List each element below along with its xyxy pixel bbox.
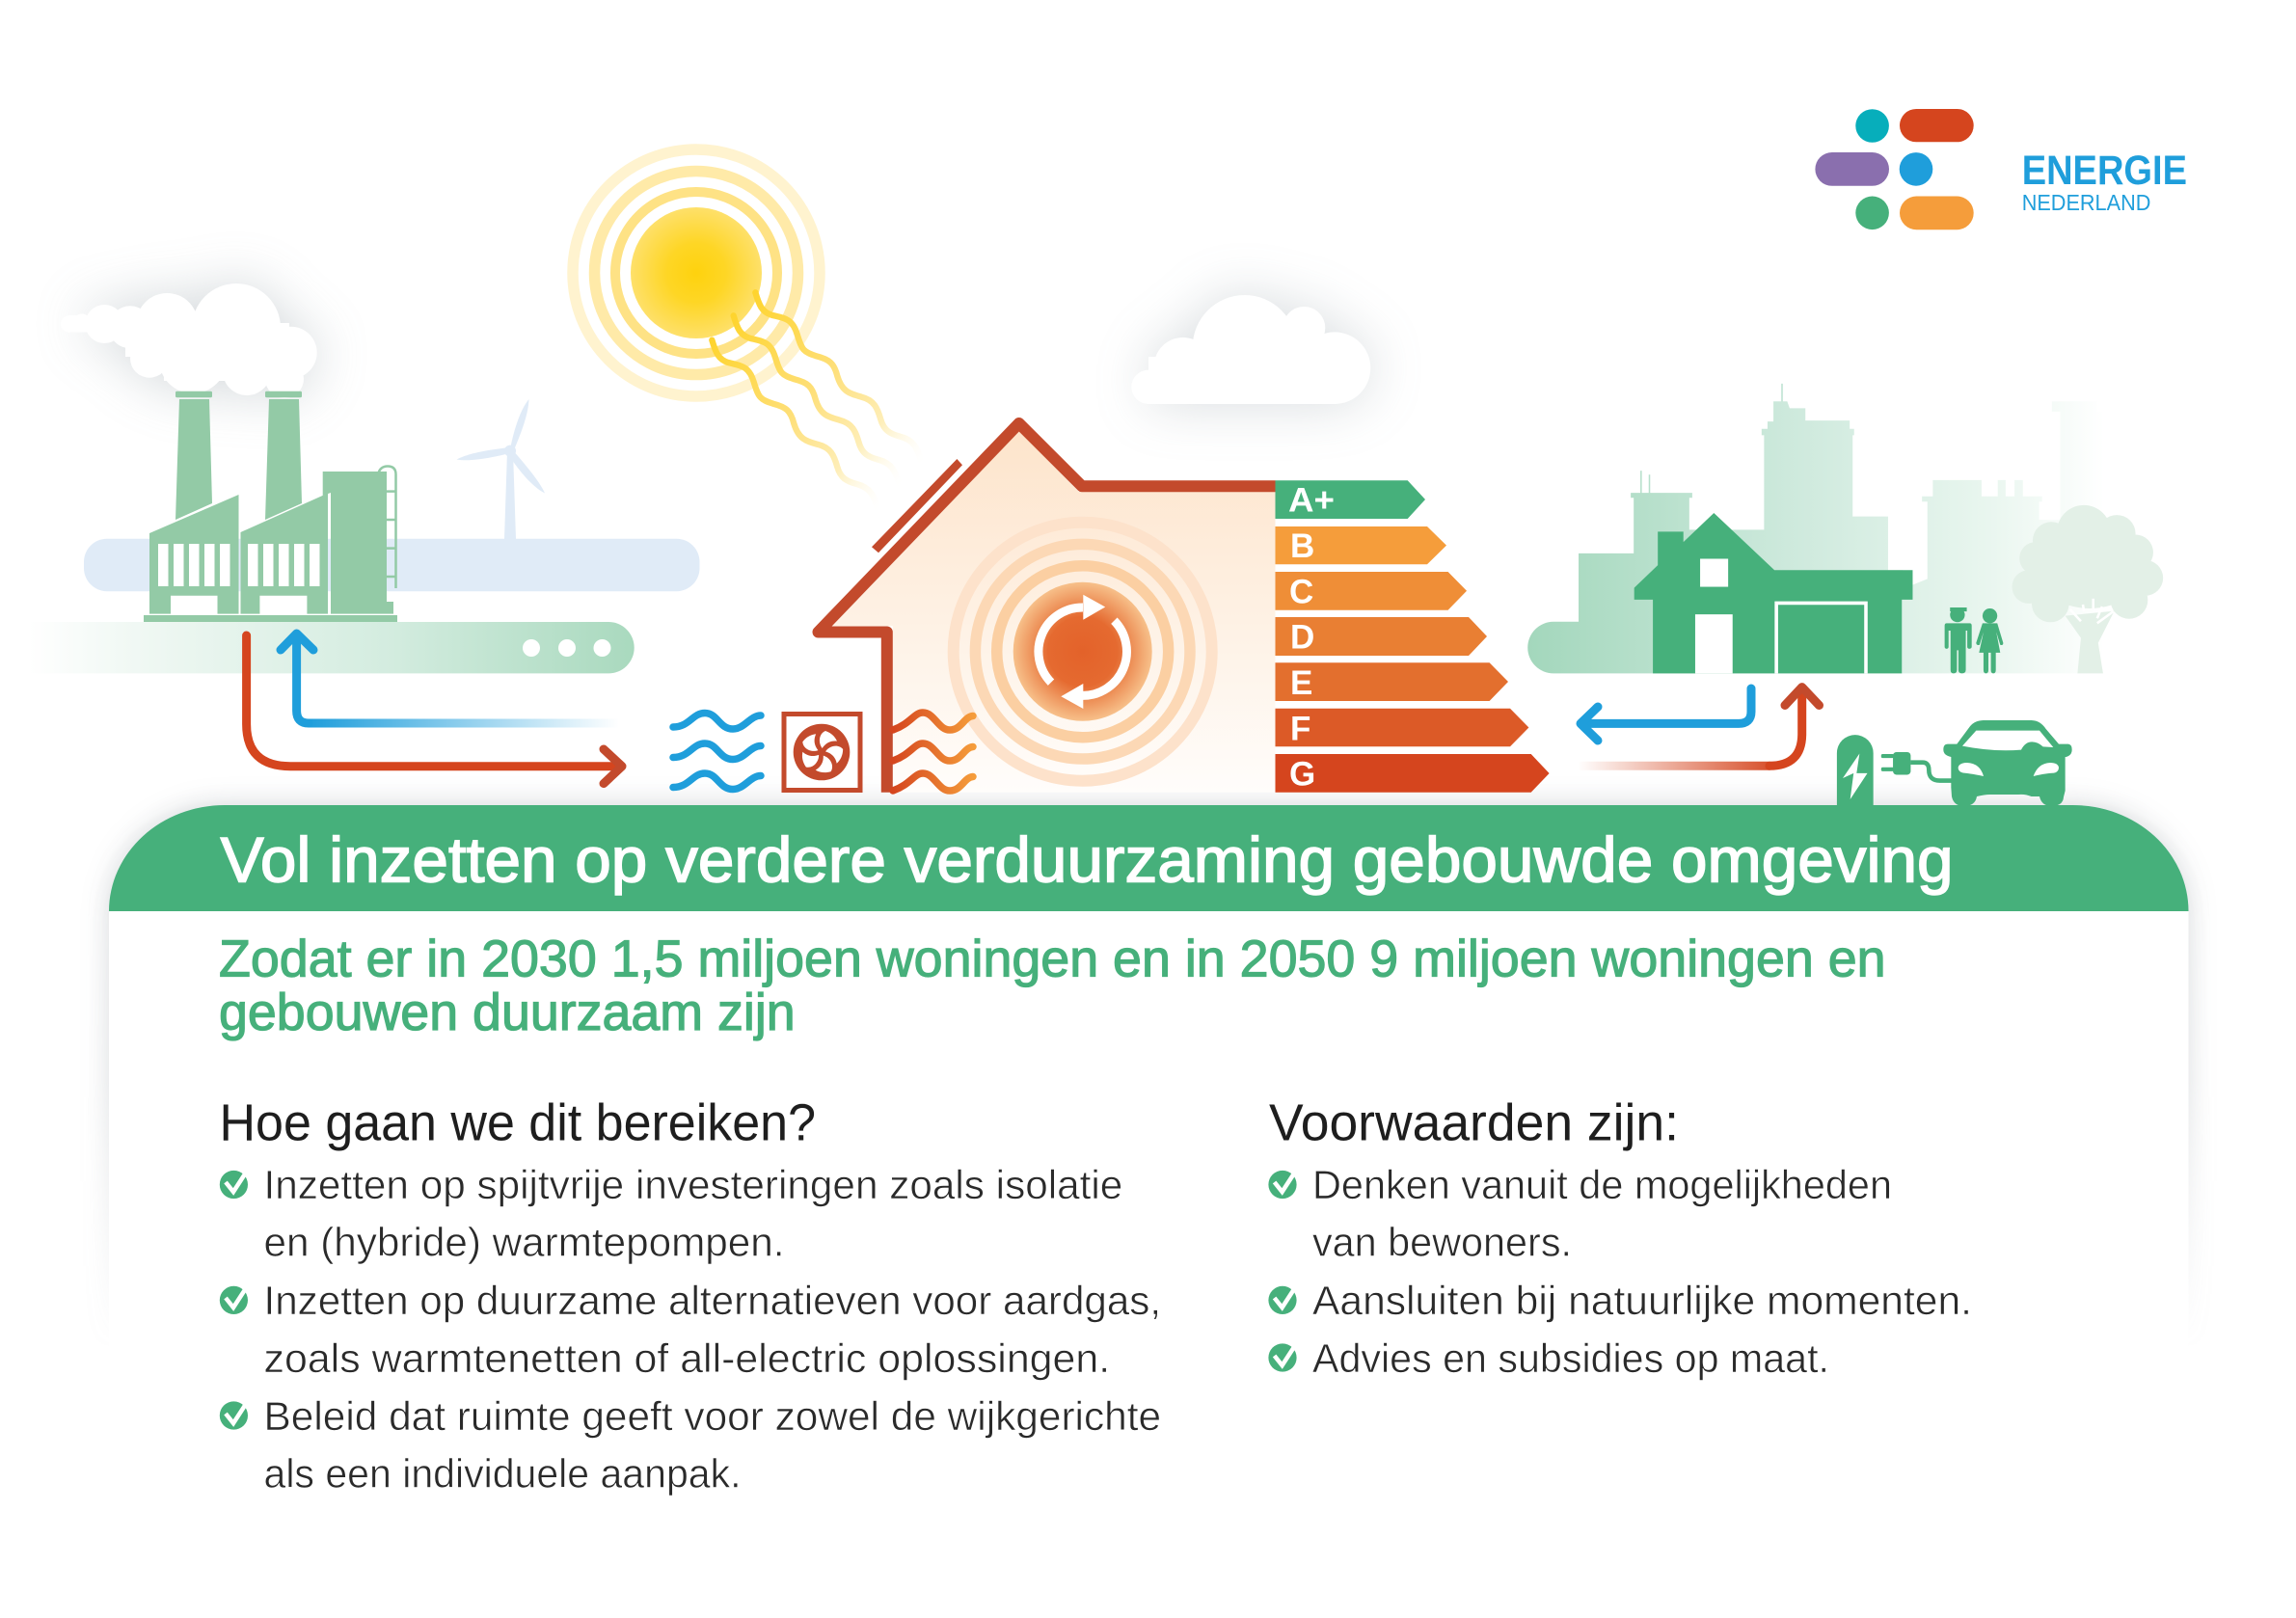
orange heat waves [893, 713, 973, 791]
panel white body [109, 911, 2189, 1374]
subtitle [219, 930, 1886, 1041]
right column: conditions [1268, 1094, 1972, 1381]
blue waves [673, 714, 761, 789]
sun rays [712, 292, 923, 514]
solar panel [872, 459, 962, 553]
label G: G [1289, 756, 1315, 794]
icon: heat pump unit [784, 714, 860, 791]
tree [2012, 505, 2163, 673]
label D [1275, 617, 1487, 657]
arrow: blue from town [1580, 688, 1751, 741]
label C [1275, 572, 1467, 610]
list item 2: Aansluiten bij natuurlijke momenten. [1312, 1278, 1972, 1323]
list item 1: Inzetten op spijtvrije investeringen zoals isolatie [264, 1162, 1122, 1207]
town scene [1527, 384, 2163, 673]
check icon 3 [220, 1401, 248, 1430]
check icon 2 [1268, 1286, 1297, 1314]
list item 1: van bewoners. [1312, 1219, 1572, 1265]
left column: how [220, 1094, 1161, 1497]
list item 2: zoals warmtenetten of all-electric oplossingen. [264, 1335, 1110, 1381]
list item 1 [264, 1162, 1122, 1265]
label A+: A+ [1288, 482, 1335, 520]
title: Vol inzetten op verdere verduurzaming gebouwde omgeving [221, 823, 1954, 895]
list item 2 [264, 1278, 1161, 1381]
green title banner [109, 805, 2189, 911]
label B: B [1290, 527, 1314, 565]
people [1945, 607, 2003, 673]
green road [29, 622, 635, 673]
green house [1634, 513, 1912, 673]
label D: D [1290, 619, 1314, 657]
list item 1 [1312, 1162, 1892, 1265]
subtitle: Zodat er in 2030 1,5 miljoen woningen en in 2050 9 miljoen woningen en [219, 930, 1886, 987]
list item 3 [264, 1393, 1161, 1497]
logo: Energie Nederland [1815, 109, 2187, 229]
label E [1275, 662, 1508, 702]
wind turbine [457, 399, 545, 539]
arrow: blue towards factory [281, 634, 619, 723]
smoke cloud [61, 283, 317, 398]
arrow: red towards town [1578, 688, 1819, 766]
label F [1275, 709, 1528, 747]
list item 3: als een individuele aanpak. [264, 1451, 741, 1497]
house [818, 423, 1275, 793]
label A+ [1275, 480, 1425, 520]
cloud [1131, 295, 1370, 404]
icon: circular arrows [1039, 595, 1126, 709]
icon: charging post and car [1837, 720, 2072, 810]
logo: Energie Nederland: ENERGIE [2022, 148, 2187, 194]
list item 1: en (hybride) warmtepompen. [264, 1219, 785, 1265]
label E: E [1290, 664, 1312, 702]
list item 1: Denken vanuit de mogelijkheden [1312, 1162, 1892, 1207]
logo: Energie Nederland: NEDERLAND [2022, 190, 2150, 215]
label C: C [1289, 573, 1313, 610]
arrow: red outgoing from factory [247, 635, 622, 784]
skyline [1527, 384, 2104, 673]
label B [1275, 526, 1446, 565]
label G [1275, 754, 1550, 794]
label F: F [1290, 710, 1310, 747]
check icon 3 [1268, 1343, 1297, 1372]
list item 2: Inzetten op duurzame alternatieven voor aardgas, [264, 1278, 1161, 1323]
panel shadow [98, 793, 2200, 1227]
list item 3: Beleid dat ruimte geeft voor zowel de wijkgerichte [264, 1393, 1161, 1439]
factory [144, 391, 397, 622]
subtitle: gebouwen duurzaam zijn [219, 984, 796, 1041]
sun [573, 149, 820, 396]
heading: Voorwaarden zijn: [1269, 1094, 1679, 1152]
blue horizon bar [84, 539, 700, 591]
energy labels [1275, 480, 1550, 794]
heading: Hoe gaan we dit bereiken? [220, 1094, 816, 1152]
check icon 1 [220, 1171, 248, 1199]
list item 3: Advies en subsidies op maat. [1312, 1335, 1829, 1381]
check icon 1 [1268, 1171, 1297, 1199]
check icon 2 [220, 1286, 248, 1314]
